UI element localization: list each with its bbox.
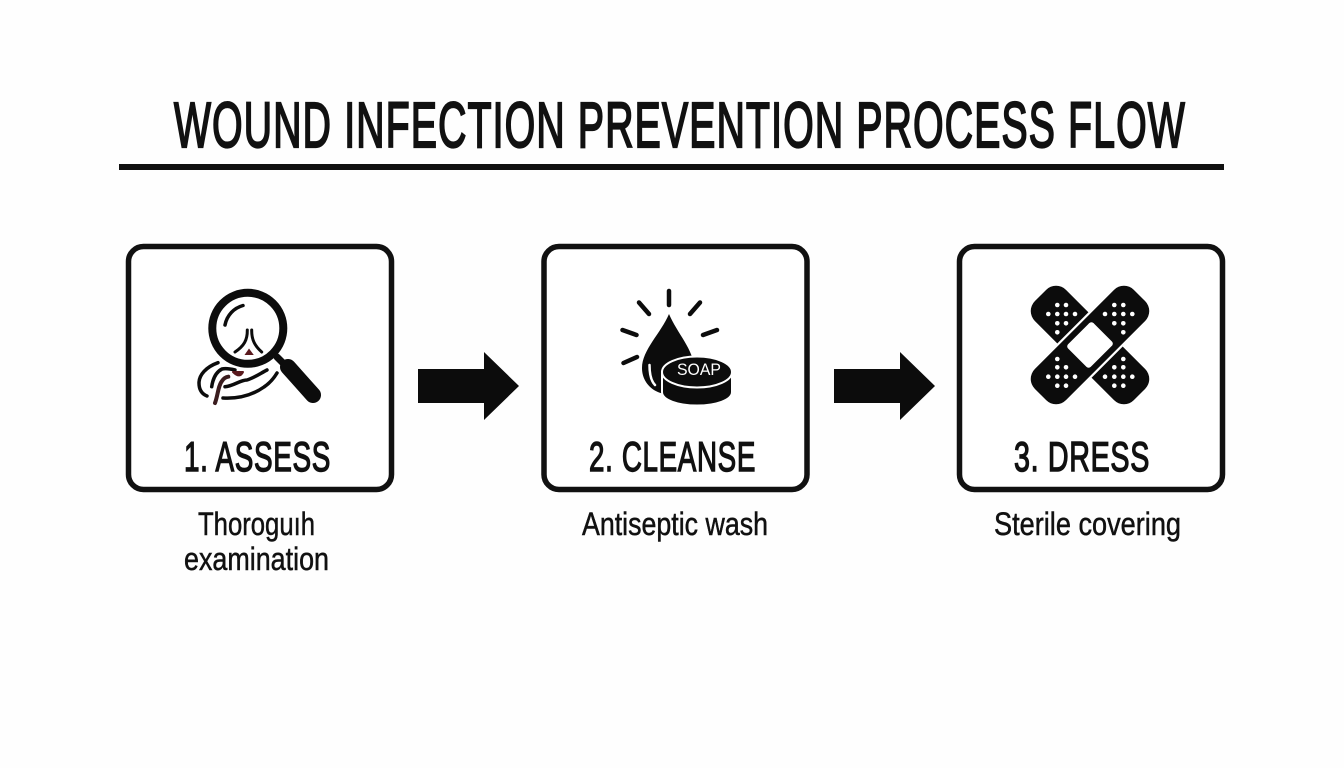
label: 1. ASSESS: 1. ASSESS [184, 433, 331, 480]
caption: step 1: examination [184, 541, 329, 577]
icon: water drop and soap [622, 291, 732, 406]
panel: step 1 assess [128, 246, 392, 490]
icon: crossed adhesive bandages [1025, 280, 1155, 410]
caption: step 2: Antiseptic wash [582, 506, 768, 542]
icon: magnifying glass over wounded hand [199, 293, 313, 403]
icon: water drop and soap: SOAP [677, 360, 721, 379]
label: 3. DRESS: 3. DRESS [1014, 433, 1150, 480]
caption: step 1: Thoroguıh [198, 506, 315, 542]
caption: step 1 [184, 506, 329, 577]
label: 2. CLEANSE: 2. CLEANSE [589, 433, 756, 480]
arrow: step 2 to step 3 [834, 352, 935, 420]
panel: step 2 cleanse [544, 246, 807, 490]
arrow: step 1 to step 2 [418, 352, 519, 420]
caption: step 3: Sterile covering [994, 506, 1181, 542]
panel: step 3 dress [960, 246, 1222, 490]
